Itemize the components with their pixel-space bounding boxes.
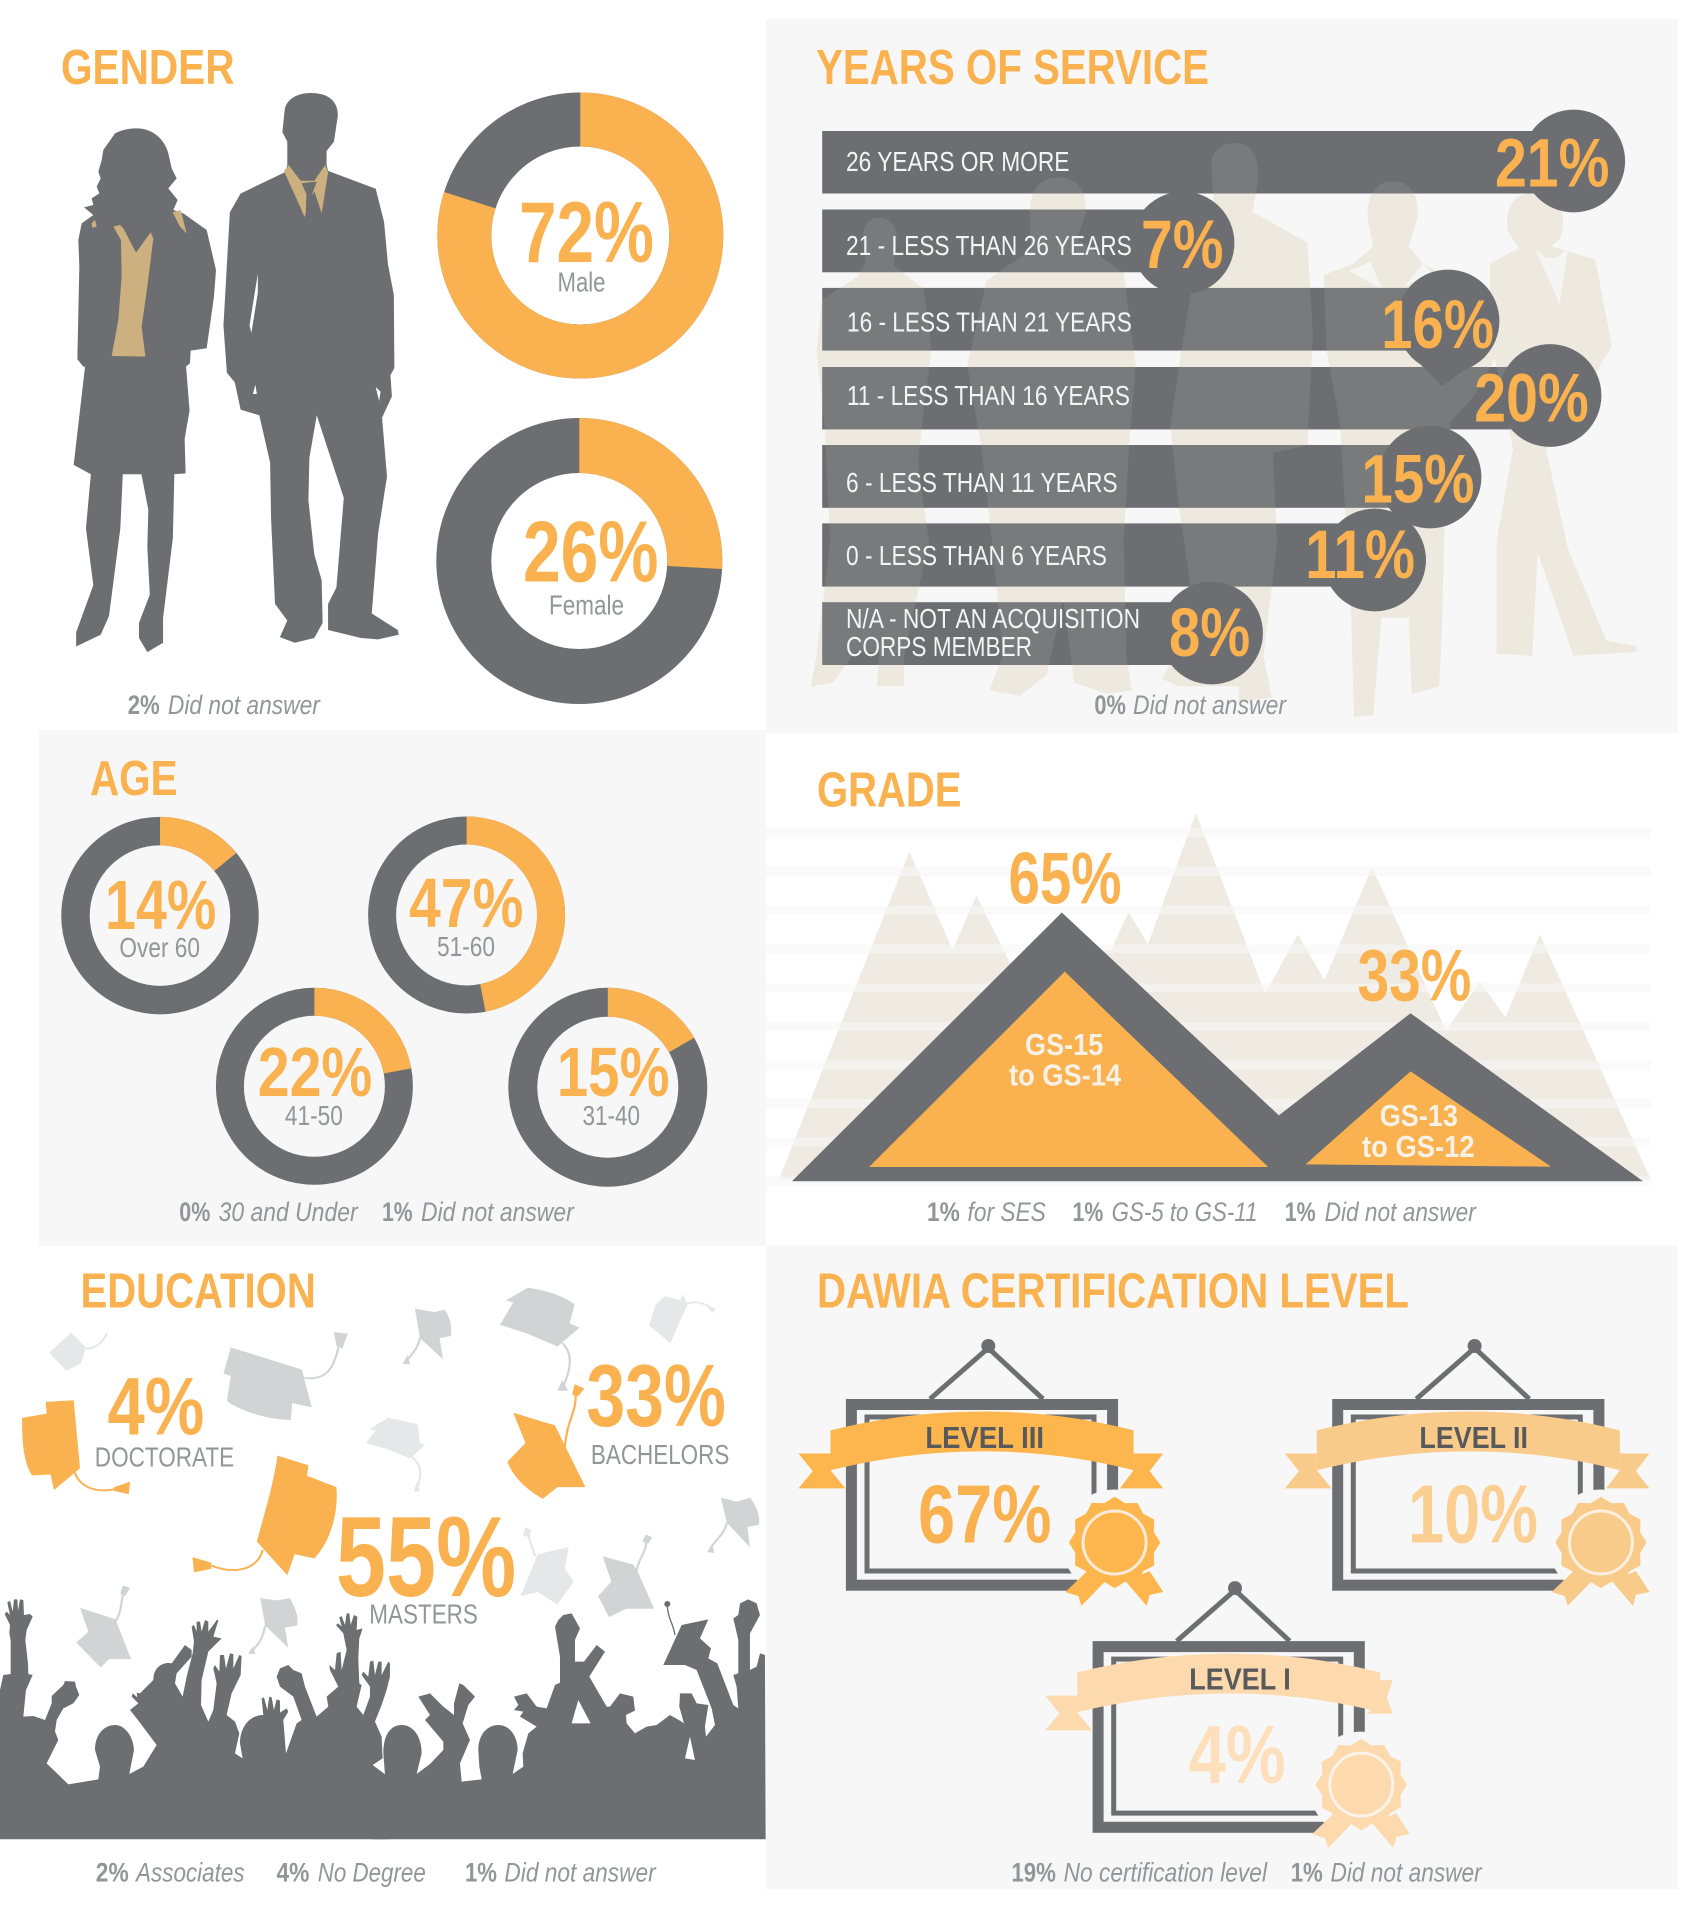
footnote: grade: 1%: [927, 1197, 960, 1227]
row: 11 to 16 years 20%: 11 - LESS THAN 16 YEARS: [847, 380, 1130, 411]
donut chart: 41-50 22%: [230, 1002, 399, 1171]
footnote: gender: 2%: [128, 690, 160, 720]
donut chart: female 26%: Female: [549, 590, 624, 620]
donut chart: 31-40 15%: 15%: [557, 1033, 670, 1111]
value: bachelors 33%: 33%: [586, 1346, 726, 1445]
footnote: education: Associates: [134, 1858, 245, 1888]
certificate: level II 10%: 10%: [1408, 1468, 1538, 1560]
row: 16 to 21 years 16%: [847, 270, 1499, 386]
value: bachelors 33%: BACHELORS: [591, 1439, 729, 1470]
footnote: education: Did not answer: [504, 1858, 657, 1888]
row: not an acquisition corps member 8%: 8%: [1169, 594, 1250, 671]
certificate: level II 10%: [1285, 1339, 1654, 1606]
row: 0 to 6 years 11%: [846, 509, 1426, 611]
donut chart: male 72%: 72%: [519, 185, 654, 281]
icon: woman silhouette: [74, 128, 216, 652]
certificate: level III 67%: 67%: [918, 1468, 1052, 1560]
row: 6 to 11 years 15%: [846, 426, 1481, 528]
certificate: level I 4%: [1045, 1581, 1414, 1848]
panel: DAWIA certification level: [766, 1246, 1678, 1889]
row: 16 to 21 years 16%: 16 - LESS THAN 21 YEARS: [847, 306, 1132, 337]
heading: gender: GENDER: [61, 41, 234, 95]
value: 33% GS-13 to GS-12: [1358, 936, 1475, 1164]
donut chart: 41-50 22%: 41-50: [285, 1100, 343, 1131]
certificate: level III 67%: [798, 1339, 1168, 1606]
icon: scattered grey graduation caps: [49, 1288, 759, 1668]
row: 21 to 26 years 7%: 7%: [1141, 206, 1224, 283]
footnote: grade: 1%: [1072, 1197, 1103, 1227]
panel: gender: [61, 41, 696, 720]
value: doctorate 4%: [95, 1362, 234, 1472]
donut chart: over 60 14%: 14%: [105, 866, 216, 944]
footnote: DAWIA certification: 19%: [1011, 1858, 1056, 1888]
row: not an acquisition corps member 8%: [846, 582, 1263, 684]
certificate: level III 67%: LEVEL III: [925, 1420, 1044, 1455]
donut chart: male 72%: [464, 120, 696, 352]
value: 65% GS-15 to GS-14: GS-15: [1025, 1027, 1103, 1062]
donut chart: 41-50 22%: 22%: [258, 1033, 372, 1111]
value: masters 55%: MASTERS: [369, 1598, 478, 1630]
icon: crowd silhouette raising hands: [0, 1599, 766, 1839]
icon: people silhouettes: [811, 143, 1636, 717]
value: 33% GS-13 to GS-12: 33%: [1358, 936, 1471, 1016]
row: 21 to 26 years 7%: [846, 192, 1234, 294]
value: 65% GS-15 to GS-14: to GS-14: [1009, 1058, 1122, 1093]
footnote: DAWIA certification: 1%: [1291, 1858, 1323, 1888]
footnote: age: 0%: [179, 1197, 210, 1227]
row: 11 to 16 years 20%: [847, 344, 1601, 447]
heading: DAWIA certification level: DAWIA CERTIFICATION LEVEL: [817, 1264, 1409, 1318]
footnote: gender: Did not answer: [168, 690, 321, 720]
footnote: grade: Did not answer: [1325, 1197, 1477, 1227]
row: not an acquisition corps member 8%: N/A - NOT AN ACQUISITION: [846, 603, 1140, 634]
heading: grade: GRADE: [817, 763, 962, 817]
chart: service bars: [822, 131, 1573, 665]
icon: orange graduation caps: [22, 1384, 585, 1575]
donut chart: female 26%: 26%: [523, 504, 658, 600]
icon: man silhouette: [223, 93, 399, 643]
row: 26 years or more 21%: 26 YEARS OR MORE: [846, 146, 1070, 177]
footnote: DAWIA certification: Did not answer: [1330, 1858, 1483, 1888]
value: doctorate 4%: 4%: [108, 1362, 204, 1453]
donut chart: over 60 14%: [76, 831, 244, 1000]
footnote: education: 2%: [96, 1858, 129, 1888]
row: 6 to 11 years 15%: 15%: [1362, 441, 1474, 518]
certificate: level II 10%: LEVEL II: [1419, 1420, 1528, 1455]
row: 26 years or more 21%: 21%: [1495, 124, 1609, 201]
footnote: years of service: Did not answer: [1133, 690, 1287, 720]
footnote: age: Did not answer: [421, 1197, 575, 1227]
donut chart: 31-40 15%: 31-40: [582, 1100, 640, 1131]
heading: years of service: YEARS OF SERVICE: [816, 41, 1209, 95]
footnote: grade: 1%: [1285, 1197, 1316, 1227]
row: 6 to 11 years 15%: 6 - LESS THAN 11 YEARS: [846, 467, 1118, 498]
row: not an acquisition corps member 8%: CORPS MEMBER: [846, 631, 1032, 662]
donut chart: 51-60 47%: 47%: [409, 864, 523, 942]
footnote: grade: for SES: [968, 1197, 1046, 1227]
donut chart: 31-40 15%: [523, 1002, 693, 1172]
value: 33% GS-13 to GS-12: GS-13: [1380, 1098, 1458, 1133]
panel: years of service: [766, 19, 1678, 733]
footnote: years of service: 0%: [1094, 690, 1126, 720]
footnote: education: No Degree: [318, 1858, 426, 1888]
panel: grade: [766, 763, 1651, 1227]
value: 65% GS-15 to GS-14: 65%: [1008, 838, 1122, 919]
value: 33% GS-13 to GS-12: to GS-12: [1362, 1129, 1475, 1164]
panel: age: [39, 730, 766, 1246]
row: 21 to 26 years 7%: 21 - LESS THAN 26 YEARS: [846, 230, 1132, 261]
footnote: grade: [927, 1197, 1477, 1227]
row: 0 to 6 years 11%: 11%: [1305, 516, 1415, 593]
value: masters 55%: 55%: [336, 1494, 516, 1621]
footnote: education: 4%: [276, 1858, 309, 1888]
row: 16 to 21 years 16%: 16%: [1381, 286, 1494, 363]
footnote: DAWIA certification: [1011, 1858, 1483, 1888]
donut chart: over 60 14%: Over 60: [119, 932, 200, 963]
row: 0 to 6 years 11%: 0 - LESS THAN 6 YEARS: [846, 540, 1107, 571]
footnote: DAWIA certification: No certification level: [1064, 1858, 1268, 1888]
row: 26 years or more 21%: [846, 110, 1625, 212]
footnote: age: 1%: [382, 1197, 413, 1227]
footnote: education: [96, 1858, 657, 1888]
certificate: level I 4%: LEVEL I: [1189, 1662, 1291, 1697]
value: bachelors 33%: [586, 1346, 729, 1470]
donut chart: female 26%: [464, 446, 695, 676]
value: doctorate 4%: DOCTORATE: [95, 1442, 234, 1472]
chart: mountain peaks: [766, 813, 1651, 1186]
row: 11 to 16 years 20%: 20%: [1474, 359, 1589, 436]
certificate: level I 4%: 4%: [1188, 1708, 1286, 1801]
footnote: grade: GS-5 to GS-11: [1112, 1197, 1258, 1227]
footnote: gender: [128, 690, 321, 720]
heading: age: AGE: [90, 752, 178, 806]
heading: education: EDUCATION: [80, 1264, 316, 1318]
donut chart: male 72%: Male: [558, 267, 606, 298]
footnote: age: 30 and Under: [219, 1197, 358, 1227]
value: 65% GS-15 to GS-14: [1008, 838, 1122, 1093]
panel: education: [0, 1264, 766, 1888]
footnote: education: 1%: [465, 1858, 497, 1888]
donut chart: 51-60 47%: 51-60: [437, 931, 495, 962]
footnote: age: [179, 1197, 575, 1227]
silhouettes showing through the bars: [811, 143, 1636, 717]
donut chart: 51-60 47%: [382, 830, 551, 1000]
